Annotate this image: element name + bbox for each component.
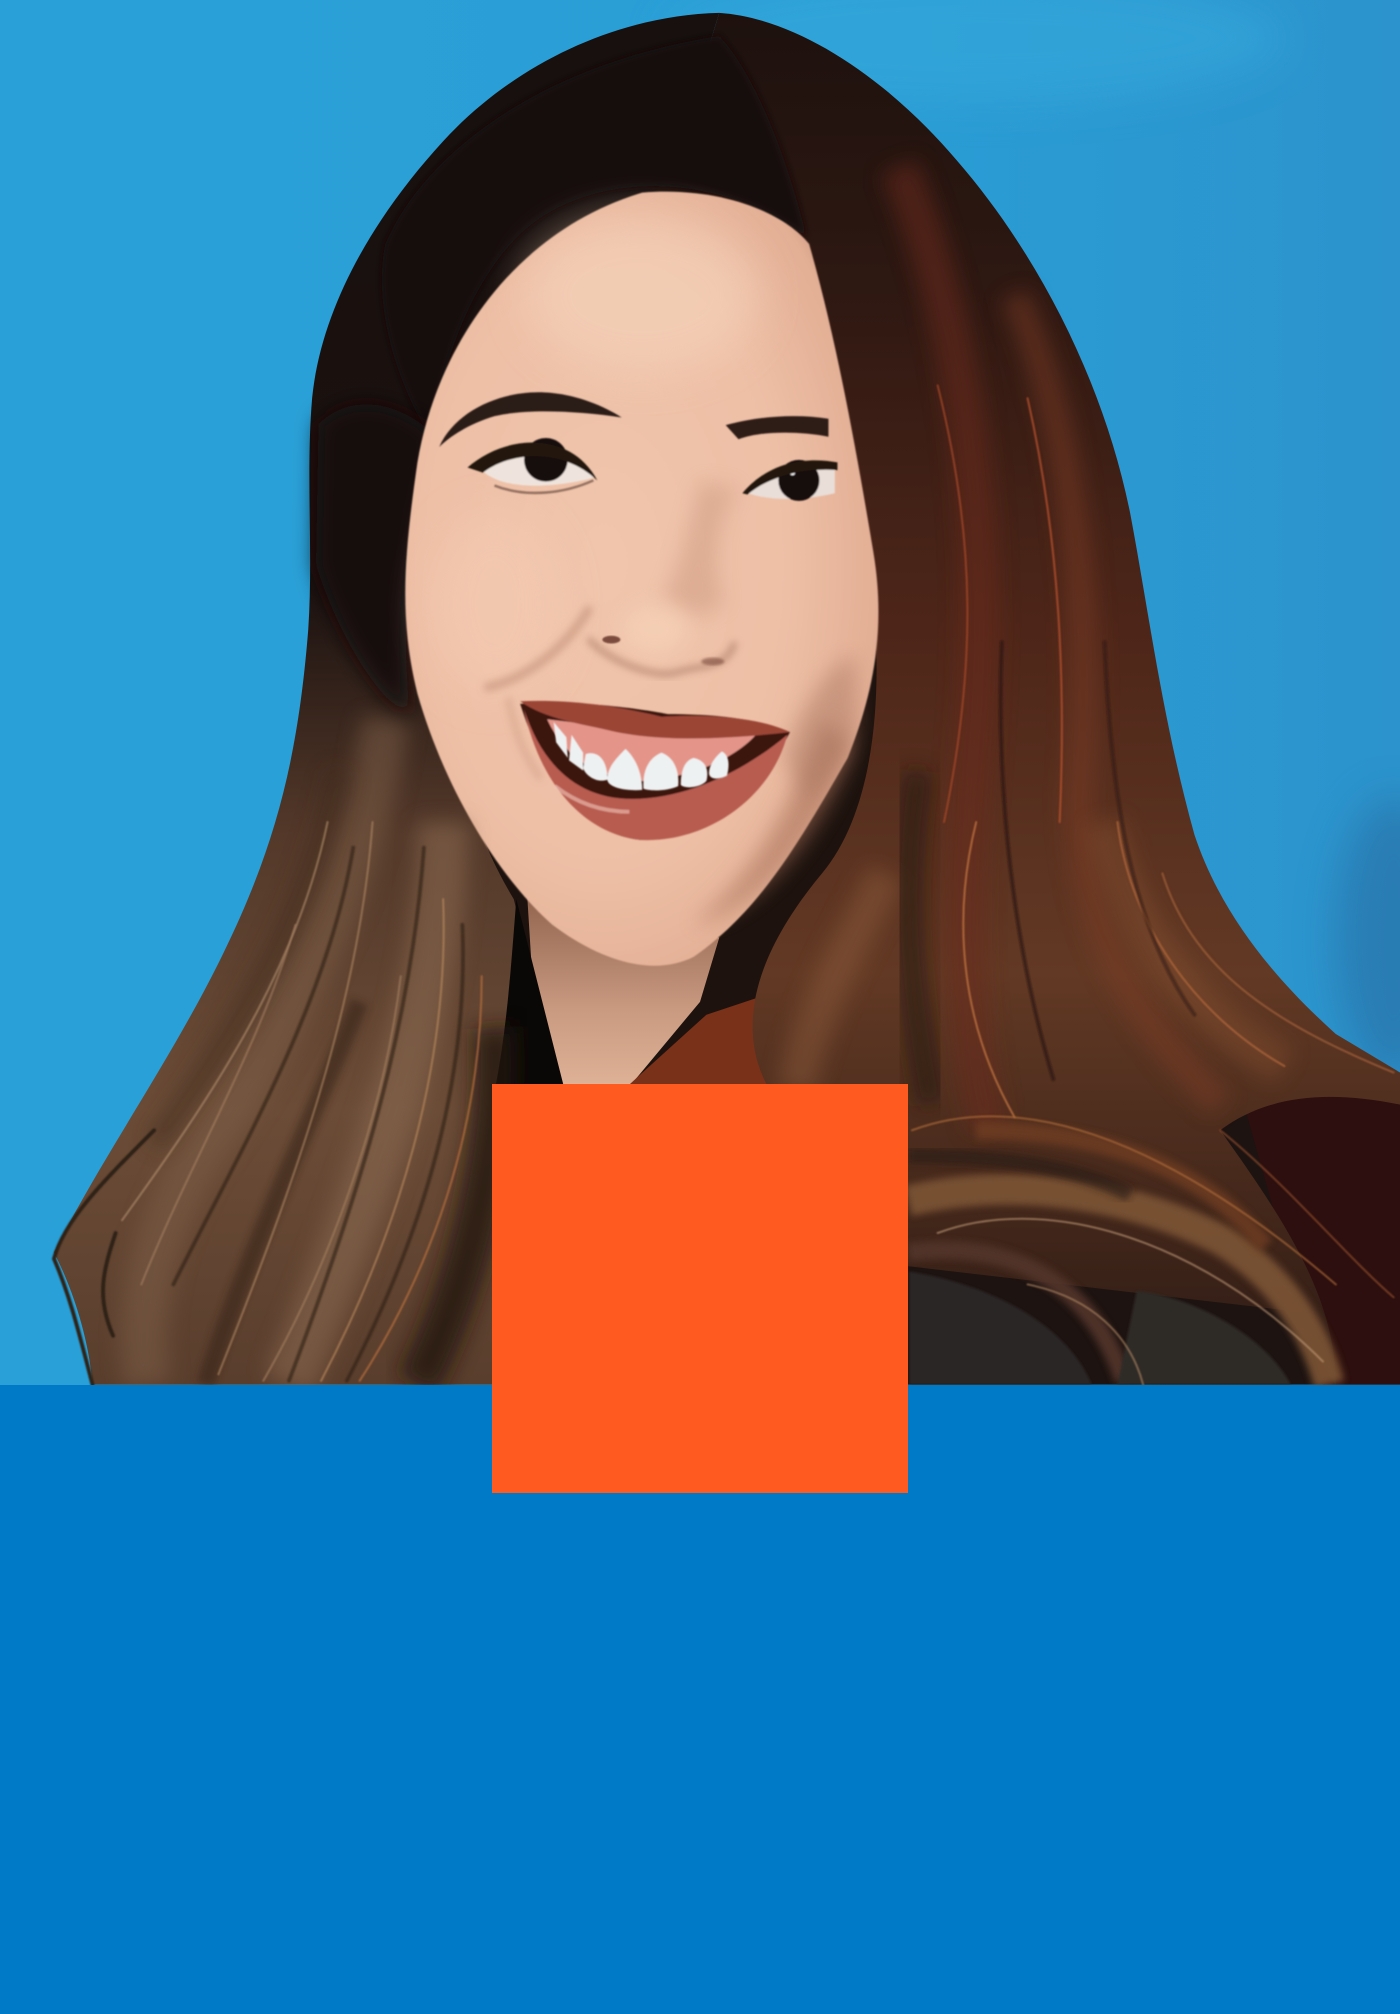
hair wisps at left edge (54, 1130, 154, 1385)
lower blue panel (0, 1385, 1400, 2014)
left eye (468, 438, 597, 493)
neck (527, 886, 719, 1092)
face (405, 192, 878, 966)
jacket (873, 1066, 1400, 1385)
hair underlayer behind face and neck (424, 128, 899, 1105)
mouth (520, 701, 790, 840)
broad hair colour bands (144, 167, 1284, 1385)
collar (624, 989, 809, 1105)
fine hair highlights (122, 385, 1394, 1385)
orange square (492, 1084, 908, 1493)
portrait photo: smiling woman on blue backdrop (0, 0, 1400, 1385)
teeth (554, 722, 729, 790)
hair knot over jacket (908, 1130, 1329, 1385)
blue studio backdrop (0, 0, 1400, 1386)
smile creases (488, 610, 588, 777)
nose (588, 604, 735, 674)
right eye (742, 460, 837, 501)
leather jacket panels (909, 1272, 1291, 1385)
eyebrows (439, 392, 828, 447)
hair: main mass (54, 13, 1400, 1385)
